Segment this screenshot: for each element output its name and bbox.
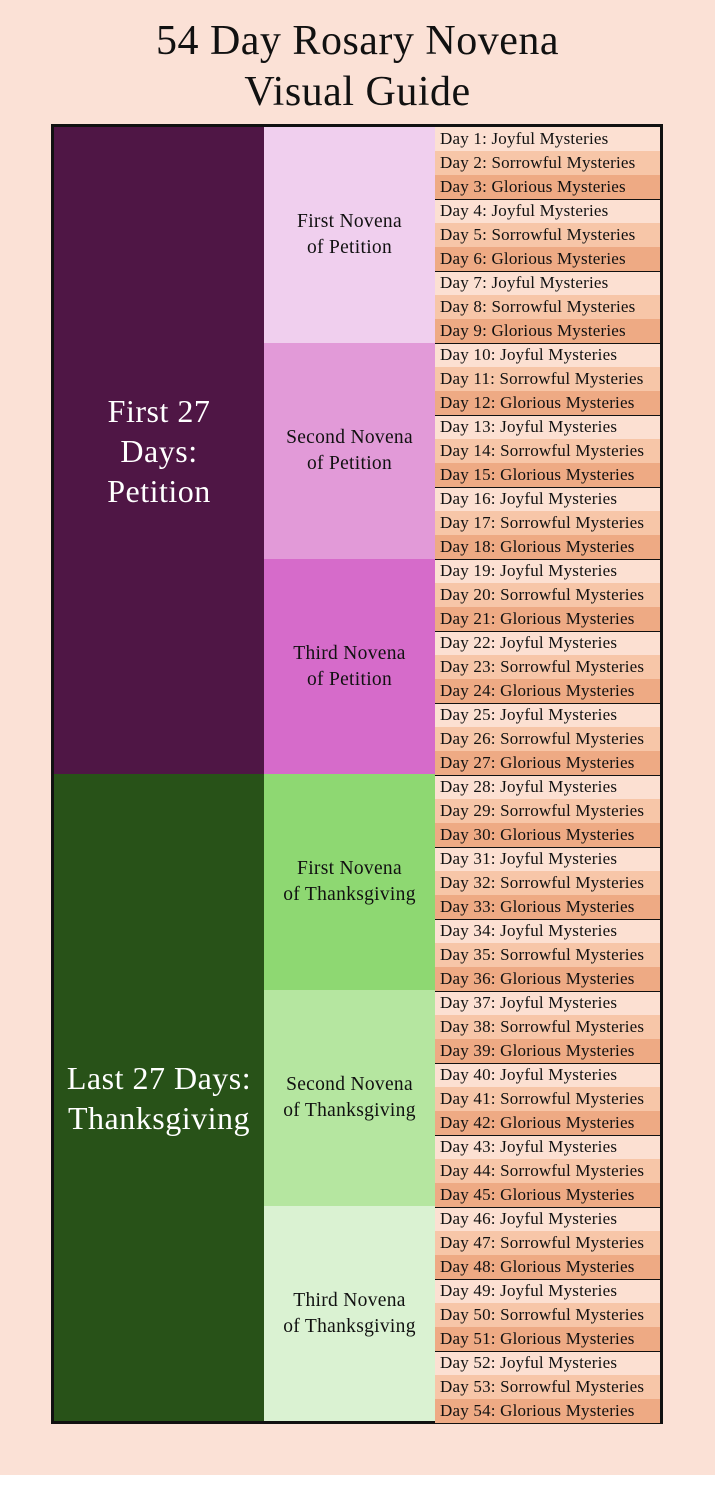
novena: first thanksgiving: First Novena — [297, 858, 402, 879]
day list: Day 10: Joyful Mysteries — [440, 345, 617, 364]
day list: Day 34: Joyful Mysteries — [440, 921, 617, 940]
day list: Day 8: Sorrowful Mysteries — [440, 297, 635, 316]
panel: last 27 days thanksgiving: Last 27 Days: — [67, 1060, 251, 1096]
title: Visual Guide — [244, 69, 471, 115]
day list: Day 28: Joyful Mysteries — [440, 777, 617, 796]
day list: Day 45: Glorious Mysteries — [440, 1185, 635, 1204]
day list: Day 52: Joyful Mysteries — [440, 1353, 617, 1372]
day list: Day 38: Sorrowful Mysteries — [440, 1017, 644, 1036]
day list: Day 33: Glorious Mysteries — [440, 897, 635, 916]
day list: Day 9: Glorious Mysteries — [440, 321, 626, 340]
day list: Day 40: Joyful Mysteries — [440, 1065, 617, 1084]
title — [156, 18, 559, 115]
day list: Day 4: Joyful Mysteries — [440, 201, 608, 220]
novena: third thanksgiving: Third Novena — [293, 1290, 406, 1310]
title: 54 Day Rosary Novena — [156, 18, 559, 64]
day list: Day 41: Sorrowful Mysteries — [440, 1089, 644, 1108]
day list: Day 42: Glorious Mysteries — [440, 1113, 635, 1132]
day list: Day 37: Joyful Mysteries — [440, 993, 617, 1012]
novena: first petition: First Novena — [297, 211, 402, 232]
day list: Day 35: Sorrowful Mysteries — [440, 945, 644, 964]
day list: Day 50: Sorrowful Mysteries — [440, 1305, 644, 1324]
novena: second petition: of Petition — [307, 453, 392, 474]
novena: third petition — [264, 559, 435, 774]
panel: first 27 days petition: Petition — [107, 472, 211, 508]
novena: third thanksgiving: of Thanksgiving — [283, 1316, 416, 1336]
day list: Day 47: Sorrowful Mysteries — [440, 1233, 644, 1252]
day list: Day 15: Glorious Mysteries — [440, 465, 635, 484]
panel: first 27 days petition: First 27 — [108, 392, 210, 428]
novena: second petition — [264, 343, 435, 559]
day list: Day 44: Sorrowful Mysteries — [440, 1161, 644, 1180]
day list: Day 27: Glorious Mysteries — [440, 753, 635, 772]
day list — [435, 127, 660, 1423]
novena: first thanksgiving — [264, 774, 435, 990]
day list: Day 30: Glorious Mysteries — [440, 825, 635, 844]
day list: Day 2: Sorrowful Mysteries — [440, 153, 635, 172]
novena: third petition: Third Novena — [293, 642, 406, 664]
day list: Day 31: Joyful Mysteries — [440, 849, 617, 868]
day list: Day 3: Glorious Mysteries — [440, 177, 626, 196]
day list: Day 49: Joyful Mysteries — [440, 1281, 617, 1300]
panel: last 27 days thanksgiving: Thanksgiving — [68, 1100, 250, 1136]
novena: third thanksgiving — [264, 1206, 435, 1421]
novena: second thanksgiving — [264, 990, 435, 1206]
day list: Day 39: Glorious Mysteries — [440, 1041, 635, 1060]
day list: Day 13: Joyful Mysteries — [440, 417, 617, 436]
day list: Day 17: Sorrowful Mysteries — [440, 513, 644, 532]
day list: Day 54: Glorious Mysteries — [440, 1401, 635, 1420]
novena: first petition — [264, 127, 435, 343]
day list: Day 26: Sorrowful Mysteries — [440, 729, 644, 748]
day list: Day 6: Glorious Mysteries — [440, 249, 626, 268]
day list: Day 14: Sorrowful Mysteries — [440, 441, 644, 460]
day list: Day 25: Joyful Mysteries — [440, 705, 617, 724]
day list: Day 1: Joyful Mysteries — [440, 129, 608, 148]
panel: first 27 days petition — [54, 127, 264, 774]
day list: Day 7: Joyful Mysteries — [440, 273, 608, 292]
novena: third petition: of Petition — [307, 668, 392, 690]
day list: Day 11: Sorrowful Mysteries — [440, 369, 644, 388]
day list: Day 23: Sorrowful Mysteries — [440, 657, 644, 676]
day list: Day 24: Glorious Mysteries — [440, 681, 635, 700]
novena: first thanksgiving: of Thanksgiving — [283, 884, 416, 905]
day list: Day 32: Sorrowful Mysteries — [440, 873, 644, 892]
day list: Day 22: Joyful Mysteries — [440, 633, 617, 652]
table — [51, 124, 663, 1424]
novena: second petition: Second Novena — [286, 427, 413, 448]
day list: Day 29: Sorrowful Mysteries — [440, 801, 644, 820]
day list: Day 18: Glorious Mysteries — [440, 537, 635, 556]
panel: last 27 days thanksgiving — [54, 774, 264, 1421]
day list: Day 16: Joyful Mysteries — [440, 489, 617, 508]
novena: second thanksgiving: of Thanksgiving — [283, 1100, 416, 1121]
novena: second thanksgiving: Second Novena — [286, 1074, 413, 1095]
day list: Day 51: Glorious Mysteries — [440, 1329, 635, 1348]
day list: Day 48: Glorious Mysteries — [440, 1257, 635, 1276]
day list: Day 20: Sorrowful Mysteries — [440, 585, 644, 604]
day list: Day 46: Joyful Mysteries — [440, 1209, 617, 1228]
novena: first petition: of Petition — [307, 237, 392, 258]
day list: Day 19: Joyful Mysteries — [440, 561, 617, 580]
panel: first 27 days petition: Days: — [120, 432, 198, 468]
day list: Day 12: Glorious Mysteries — [440, 393, 635, 412]
day list: Day 5: Sorrowful Mysteries — [440, 225, 635, 244]
day list: Day 21: Glorious Mysteries — [440, 609, 635, 628]
day list: Day 36: Glorious Mysteries — [440, 969, 635, 988]
day list: Day 43: Joyful Mysteries — [440, 1137, 617, 1156]
day list: Day 53: Sorrowful Mysteries — [440, 1377, 644, 1396]
